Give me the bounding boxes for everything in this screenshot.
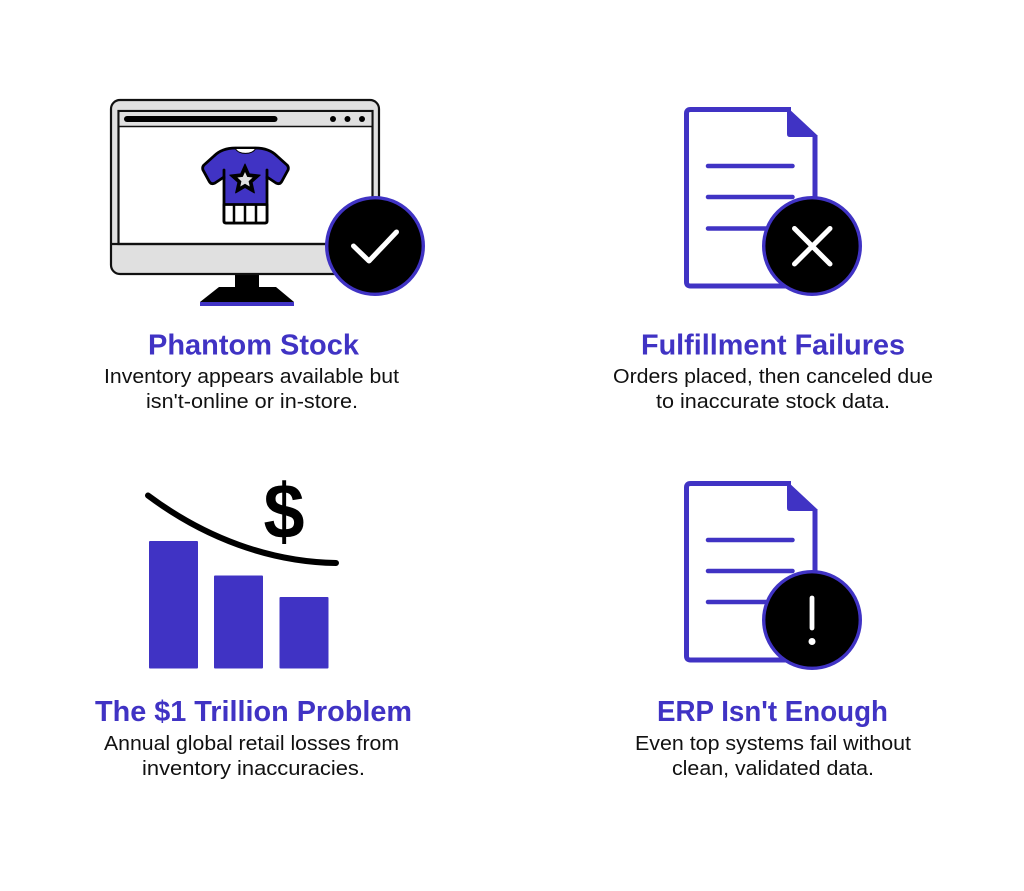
icon: t-shirt with star — [203, 148, 288, 223]
monitor stand — [200, 273, 294, 306]
text: The $1 Trillion Problem description: inventory inaccuracies. — [142, 758, 365, 780]
panel: Phantom Stock — [104, 100, 423, 413]
text: ERP Isn't Enough description: Even top systems fail without — [635, 733, 911, 755]
text: Phantom Stock description: Inventory appears available but — [104, 366, 399, 388]
panel: ERP Isn't Enough — [635, 481, 911, 780]
text: ERP Isn't Enough description: clean, validated data. — [672, 758, 874, 780]
heading: ERP Isn't Enough: ERP Isn't Enough — [657, 696, 888, 728]
text: The $1 Trillion Problem description — [104, 733, 399, 780]
panel: The $1 Trillion Problem — [95, 467, 412, 780]
document outline — [686, 107, 817, 286]
text: Fulfillment Failures description: to inaccurate stock data. — [656, 391, 890, 413]
icon: X badge — [764, 198, 860, 294]
bar chart — [149, 541, 328, 668]
text: ERP Isn't Enough description — [635, 733, 911, 780]
text: Fulfillment Failures description: Orders placed, then canceled due — [613, 366, 933, 388]
icon: computer monitor with shirt and check badge — [111, 100, 423, 306]
text: Phantom Stock description — [104, 366, 399, 413]
dollar sign: $ — [264, 467, 304, 555]
icon: falling bar chart with dollar sign — [148, 467, 336, 668]
icon: document with exclamation badge — [686, 481, 860, 668]
panel: Fulfillment Failures — [613, 107, 933, 413]
document outline — [686, 481, 817, 660]
heading: Phantom Stock: Phantom Stock — [148, 330, 360, 362]
icon: document with X badge — [686, 107, 860, 294]
monitor body — [111, 100, 379, 274]
icon: exclamation badge — [764, 572, 860, 668]
icon: check badge — [327, 198, 423, 294]
heading: Fulfillment Failures: Fulfillment Failures — [641, 330, 905, 362]
text: Phantom Stock description: isn't-online or in-store. — [146, 391, 358, 413]
heading: The $1 Trillion Problem: The $1 Trillion Problem — [95, 696, 412, 728]
text: Fulfillment Failures description — [613, 366, 933, 413]
declining trend line — [148, 496, 336, 563]
text: The $1 Trillion Problem description: Annual global retail losses from — [104, 733, 399, 755]
